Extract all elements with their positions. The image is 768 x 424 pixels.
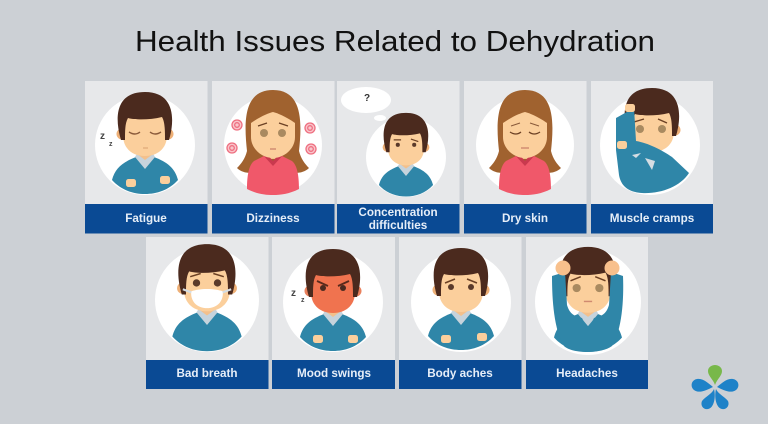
- illustration: sleepy man: z: [109, 141, 113, 148]
- panel: fatigue: Fatigue: [125, 212, 167, 225]
- panel: dizziness: [212, 81, 334, 234]
- illustration: man in pain: [428, 248, 494, 350]
- panel: bad breath: Bad breath: [176, 367, 238, 380]
- panel: body aches: Body aches: [427, 367, 493, 380]
- illustration: confused boy: [379, 113, 433, 196]
- icon: thought bubble: ?: [364, 93, 370, 104]
- panel: bad breath: [146, 237, 268, 389]
- illustration: angry man: [291, 249, 366, 351]
- panel: mood swings: Mood swings: [297, 367, 372, 380]
- illustration: man holding head: [552, 247, 623, 352]
- illustration: sleepy man: z: [100, 131, 105, 142]
- panel: headaches: [526, 237, 648, 389]
- title: Health Issues Related to Dehydration: [135, 26, 655, 58]
- panel: muscle cramps: Muscle cramps: [610, 212, 695, 225]
- illustration: angry man: z: [291, 288, 296, 299]
- panel: concentration difficulties: Concentration: [358, 206, 438, 219]
- panel: muscle cramps: [591, 81, 713, 234]
- panel: body aches: [399, 237, 522, 389]
- panel: mood swings: [272, 237, 395, 389]
- panel: dizziness: Dizziness: [246, 212, 300, 225]
- panel: fatigue: [85, 81, 208, 234]
- illustration: man wearing mask: [172, 244, 242, 351]
- illustration: dizzy woman: [226, 90, 316, 195]
- illustration: man with raised arm: [616, 88, 689, 193]
- panel: dry skin: Dry skin: [502, 212, 548, 225]
- illustration: angry man: z: [301, 297, 305, 304]
- illustration: sleepy man: [100, 92, 178, 194]
- panel: concentration difficulties: difficulties: [369, 219, 428, 232]
- icon: thought bubble: [341, 87, 391, 121]
- panel: concentration difficulties: [337, 81, 460, 234]
- illustration: tired woman: [489, 90, 561, 195]
- logo: [692, 365, 738, 409]
- panel: dry skin: [464, 81, 586, 234]
- panel: headaches: Headaches: [556, 367, 618, 380]
